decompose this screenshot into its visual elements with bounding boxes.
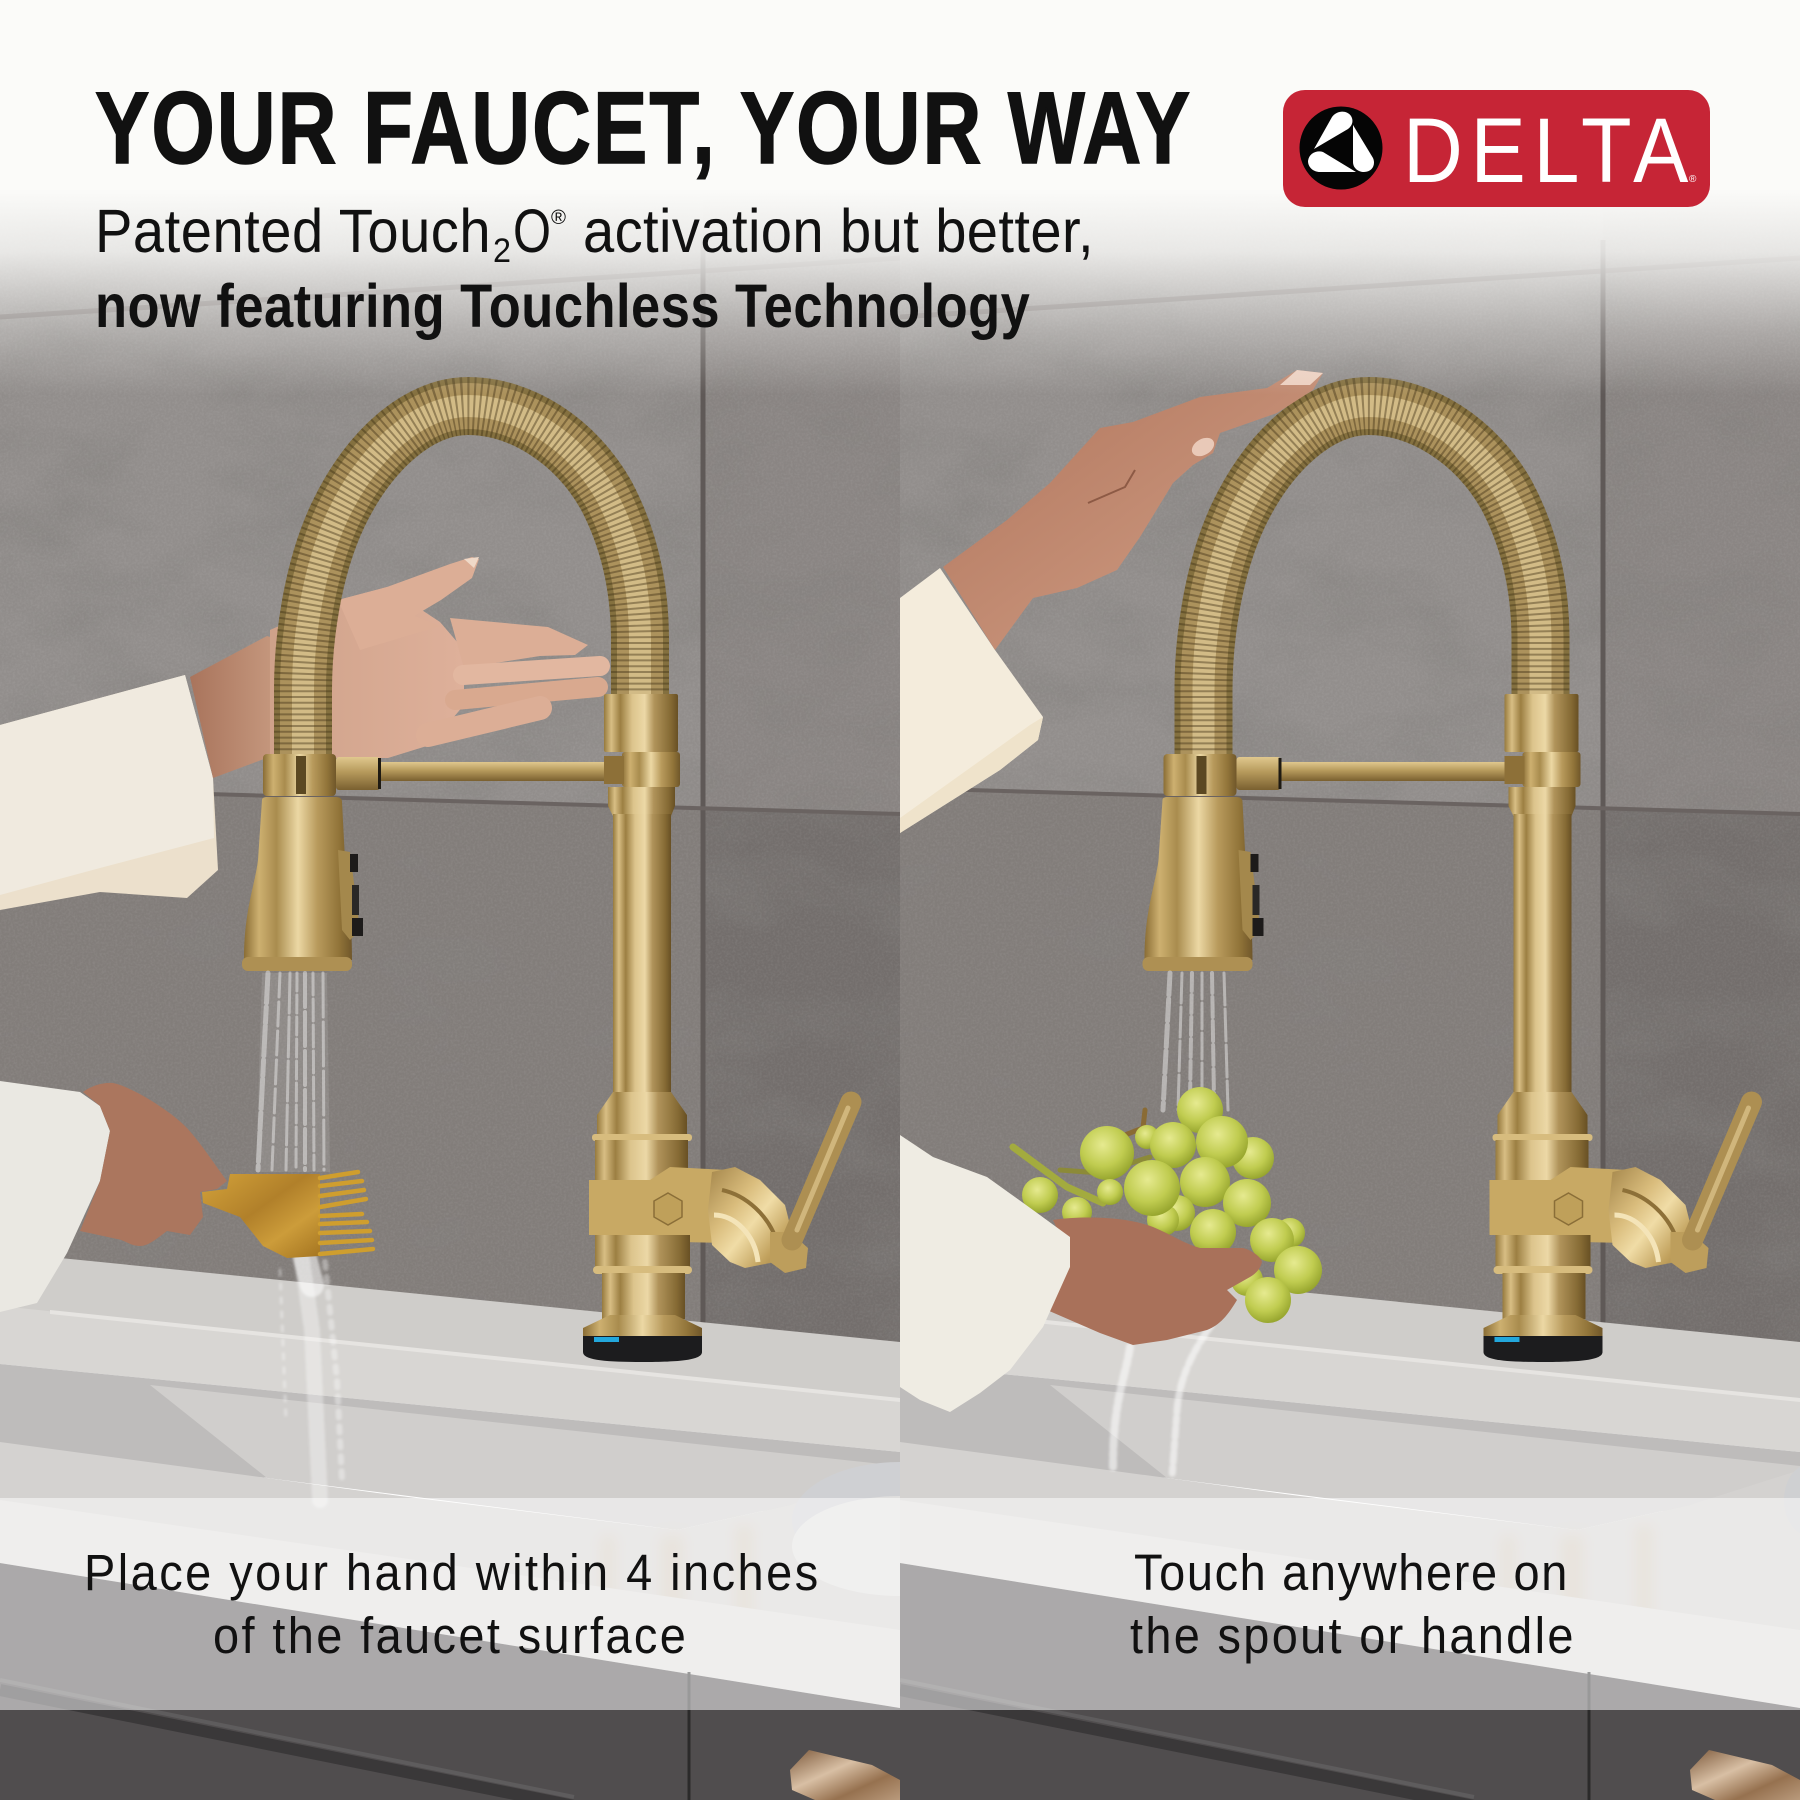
valve housing [589,1167,727,1243]
base flange [583,1315,702,1338]
base body upper [595,1140,688,1182]
right caption band [900,1498,1800,1710]
spray head [244,797,352,960]
upper wall tile [0,0,900,830]
lower wall tile [0,788,900,1400]
spout collar left [263,754,336,796]
subtitle line one: ® [551,207,566,229]
left lower hand holding forks [80,1083,227,1246]
right faucet [1142,406,1752,1362]
spring spout [303,406,640,756]
right photo panel background [900,0,1800,1800]
right lower hand holding grapes [1047,1218,1262,1345]
subtitle line one: O [513,197,551,265]
left caption text: Place your hand within 4 inches [84,1545,818,1601]
wrist [190,636,280,778]
left sleeve upper arm [0,675,218,910]
left photo panel background: tiled wall, counter, sink and cabinet [0,0,900,1800]
palm [270,587,464,758]
thumb [338,557,479,650]
middle finger [463,666,600,675]
translucent spray column [256,973,330,1172]
thumb nail [464,557,479,568]
right lower sleeve [900,1135,1070,1412]
blue indicator light [594,1337,619,1342]
left hand hovering near faucet [190,557,600,778]
title: YOUR FAUCET, YOUR WAY [95,70,1190,185]
icon: delta emblem [1300,106,1382,190]
left caption band [0,1498,900,1710]
base ring lower [593,1266,692,1274]
base cone [597,1092,687,1135]
pole middle collar [622,752,680,787]
grape bunch [1013,1087,1322,1323]
faucet: brass spring spout, spray head, pole and handle [242,406,851,1362]
thumb nail [1189,434,1217,460]
upper right wall tile [703,0,900,830]
cabinet door seam [688,1672,690,1800]
right caption text [1130,1545,1573,1664]
base body lower [595,1235,690,1267]
plate stack in left sink [872,1462,900,1498]
right caption text: the spout or handle [1130,1608,1573,1664]
wall grain texture [0,0,900,1350]
right spray water stream [1163,973,1228,1110]
fork tines [320,1172,373,1254]
right panel plate edge [1784,1464,1800,1536]
lower counter white strip [0,1500,900,1708]
thumb crease [1088,470,1135,503]
warm reflection in sink [600,1525,753,1625]
subtitle line one: Patented Touch [95,198,491,266]
wall mottling texture [0,0,900,1350]
right caption text: Touch anywhere on [1134,1545,1567,1601]
tile grout lines [0,240,900,1380]
counter lip highlight [50,1310,900,1402]
water running off right hand [1113,1313,1220,1477]
registered mark: ® [1689,174,1697,185]
left caption text [84,1545,818,1664]
pole lower collar [608,787,675,816]
subtitle line one: activation but better, [583,198,1094,266]
right sleeve upper [900,568,1043,833]
subtitle line one [95,197,1094,270]
handle foot [770,1232,808,1273]
spray head lip [242,957,352,971]
subtitle line one: 2 [493,232,511,270]
wordmark: DELTA [1403,99,1689,202]
brass cabinet pull [790,1750,900,1800]
rod connector [336,757,380,790]
finger nails [1280,370,1323,385]
Delta logo badge [1283,90,1710,207]
counter front face [0,1306,900,1452]
left lower sleeve [0,1081,110,1312]
grape stems [1013,1110,1150,1203]
main pole [613,814,671,1094]
hex bolt [654,1193,682,1225]
index finger [450,618,588,668]
sink floor [0,1442,900,1640]
right hand touching spout [943,370,1323,650]
horizontal support rod [379,762,624,781]
left spray water stream [256,973,342,1500]
sink lit wall wedge [150,1385,900,1530]
counter top surface [0,1252,900,1420]
cabinet front [0,1563,900,1800]
little finger [428,708,540,735]
lower right wall tile [703,808,900,1400]
handle lever [792,1102,851,1240]
grapes [1022,1087,1322,1323]
golden forks [202,1172,373,1258]
pole upper collar [604,694,678,752]
subtitle line two: now featuring Touchless Technology [95,272,1030,341]
base foot [602,1273,685,1319]
left caption text: of the faucet surface [213,1608,686,1664]
cabinet moulding [0,1680,574,1800]
top white fade [0,0,1800,420]
sink wall [0,1364,900,1520]
handle knurled cap [708,1167,790,1268]
base ring upper [592,1134,692,1141]
black base ring [583,1336,702,1362]
fork bodies [202,1174,320,1258]
falling water [280,1258,342,1500]
spray head button panel [338,850,363,940]
ring finger [455,687,598,700]
